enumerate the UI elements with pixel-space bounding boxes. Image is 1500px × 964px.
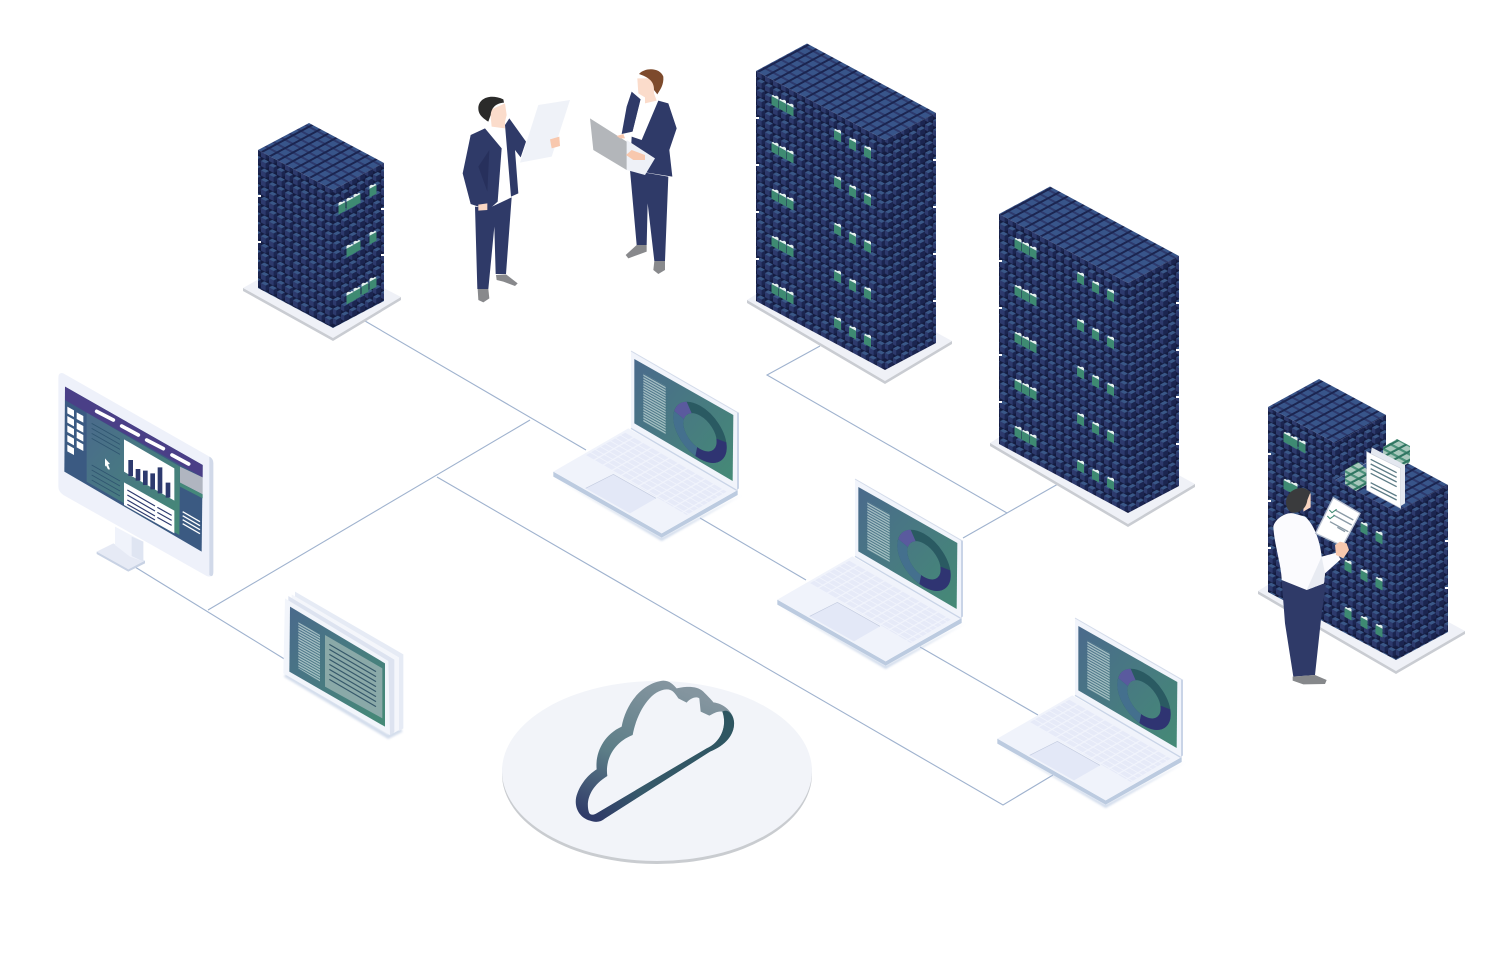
- server rack: tall centre: [747, 44, 952, 384]
- icon: cloud: [576, 681, 734, 822]
- document tablet stack: [283, 592, 403, 737]
- server rack: stepped far right: [1258, 379, 1465, 674]
- network connection lines: [135, 321, 1058, 805]
- monitor stand: [97, 527, 145, 572]
- desktop monitor: [58, 373, 213, 577]
- server rack: small left: [243, 123, 401, 341]
- person: man holding laptop: [590, 69, 677, 274]
- person: engineer with clipboard: [1273, 488, 1360, 684]
- green highlighted cubes: [1345, 439, 1410, 491]
- server rack: tall right: [990, 186, 1195, 527]
- person: man holding paper: [463, 97, 570, 302]
- document attached to stepped rack: [1367, 447, 1405, 508]
- cloud platform disc: [502, 681, 812, 864]
- laptop 3: [997, 618, 1186, 808]
- laptop 1: [553, 351, 742, 541]
- laptop 2: [777, 479, 966, 669]
